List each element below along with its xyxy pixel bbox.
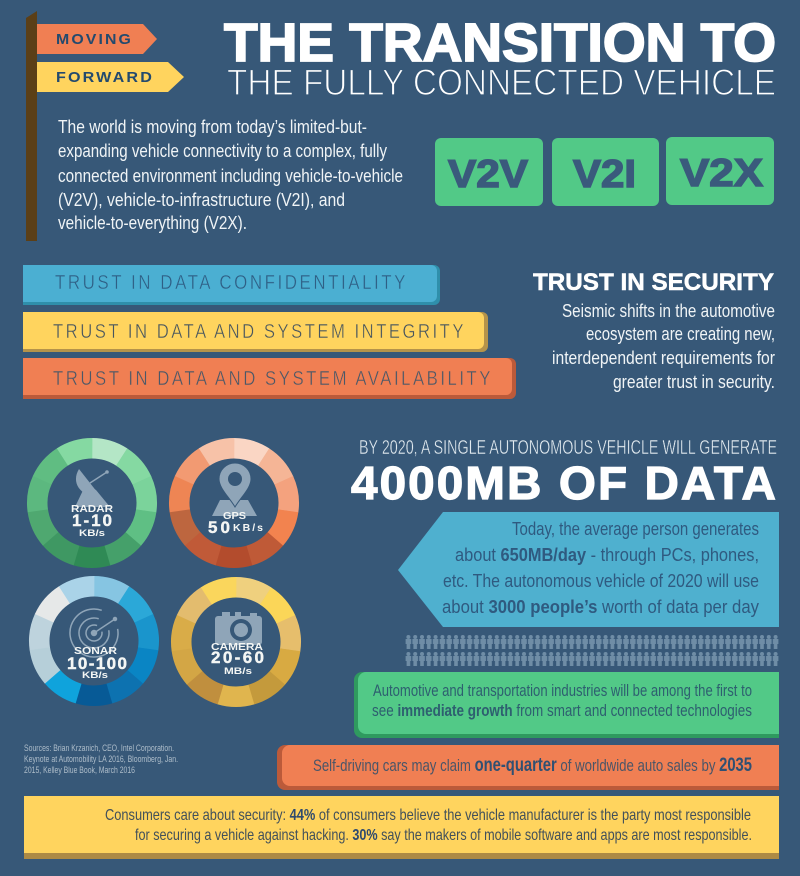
intro paragraph: (V2V), vehicle-to-infrastructure (V2I), and [58,189,345,210]
trust in security text: greater trust in security. [613,372,775,392]
bar: integrity: TRUST IN DATA AND SYSTEM INTEGRITY [53,321,466,343]
heading: 4000MB of data [351,437,778,509]
sources note: Sources: Brian Krzanich, CEO, Intel Corporation. [24,743,174,754]
callout: one-quarter of sales [277,745,779,790]
donut: radar: 1-10 [72,511,112,530]
icon: camera [215,612,262,645]
icon: sonar [66,605,122,661]
intro paragraph: vehicle-to-everything (V2X). [58,212,247,233]
intro paragraph: connected environment including vehicle-to-vehicle [58,165,403,186]
sign post [26,11,37,241]
icon: map pin [212,463,257,516]
badges: V2V V2I V2X [435,137,774,206]
donut: GPS: 50 [208,518,230,537]
callout: immediate growth: see immediate growth from smart and connected technologies [372,702,752,720]
signpost: moving forward [26,11,184,241]
donut: GPS [157,426,311,580]
donut: sonar: 10-100 [67,654,127,673]
donut: sonar [17,564,171,718]
sign: moving: MOVING [56,31,133,48]
trust bars [23,265,516,399]
callout: consumers care about security [24,796,779,859]
donut: GPS: GPS [223,510,246,522]
trust in security text [533,269,775,392]
callout: one-quarter of sales: Self-driving cars may claim one-quarter of worldwide auto sales by 2035 [313,755,752,776]
bar: integrity [23,312,488,352]
badge: V2V: V2V [448,153,528,196]
bar: availability [23,358,516,399]
donut: radar [15,426,169,580]
bar: availability: TRUST IN DATA AND SYSTEM AVAILABILITY [53,368,493,390]
sources note: Keynote at Automobility LA 2016, Bloomberg, Jan. [24,754,178,765]
sources note [24,743,178,776]
callout: immediate growth [354,672,779,738]
donut: camera: 20-60 [211,648,264,667]
donut: radar: RADAR [71,503,113,515]
badge: V2I: V2I [573,153,636,196]
sign: forward: FORWARD [56,69,154,86]
donut: sonar: KB/s [82,670,108,680]
donut: sonar: SONAR [74,645,117,657]
callout: today's data usage: about 650MB/day - through PCs, phones, [455,544,759,565]
bar: confidentiality: TRUST IN DATA CONFIDENTIALITY [55,272,408,294]
intro paragraph: expanding vehicle connectivity to a complex, fully [58,140,388,161]
donut: camera: CAMERA [211,641,263,653]
icon: rows of people [405,635,779,667]
badge: V2V [435,138,543,206]
donut: camera: MB/s [224,666,252,676]
badge: V2I [552,138,659,206]
title: THE TRANSITION TO [224,13,776,73]
intro paragraph [58,116,403,233]
donut: GPS: KB/s [233,522,263,534]
badge: V2X: V2X [680,152,763,195]
trust in security text: TRUST IN SECURITY [533,269,774,296]
sign: forward [37,62,184,92]
title [224,13,776,103]
sign: moving [37,24,157,54]
badge: V2X [666,137,774,205]
sources note: 2015, Kelley Blue Book, March 2016 [24,765,135,776]
intro paragraph: The world is moving from today’s limited-but- [58,116,367,137]
icon: radar dish [75,469,110,507]
heading: 4000MB of data: 4000MB OF DATA [351,457,778,509]
donut: radar: KB/s [79,528,105,538]
callout: today's data usage [398,512,779,627]
callout: today's data usage: about 3000 people’s worth of data per day [442,596,760,617]
donut: camera [159,565,313,719]
bar: confidentiality [23,265,440,305]
